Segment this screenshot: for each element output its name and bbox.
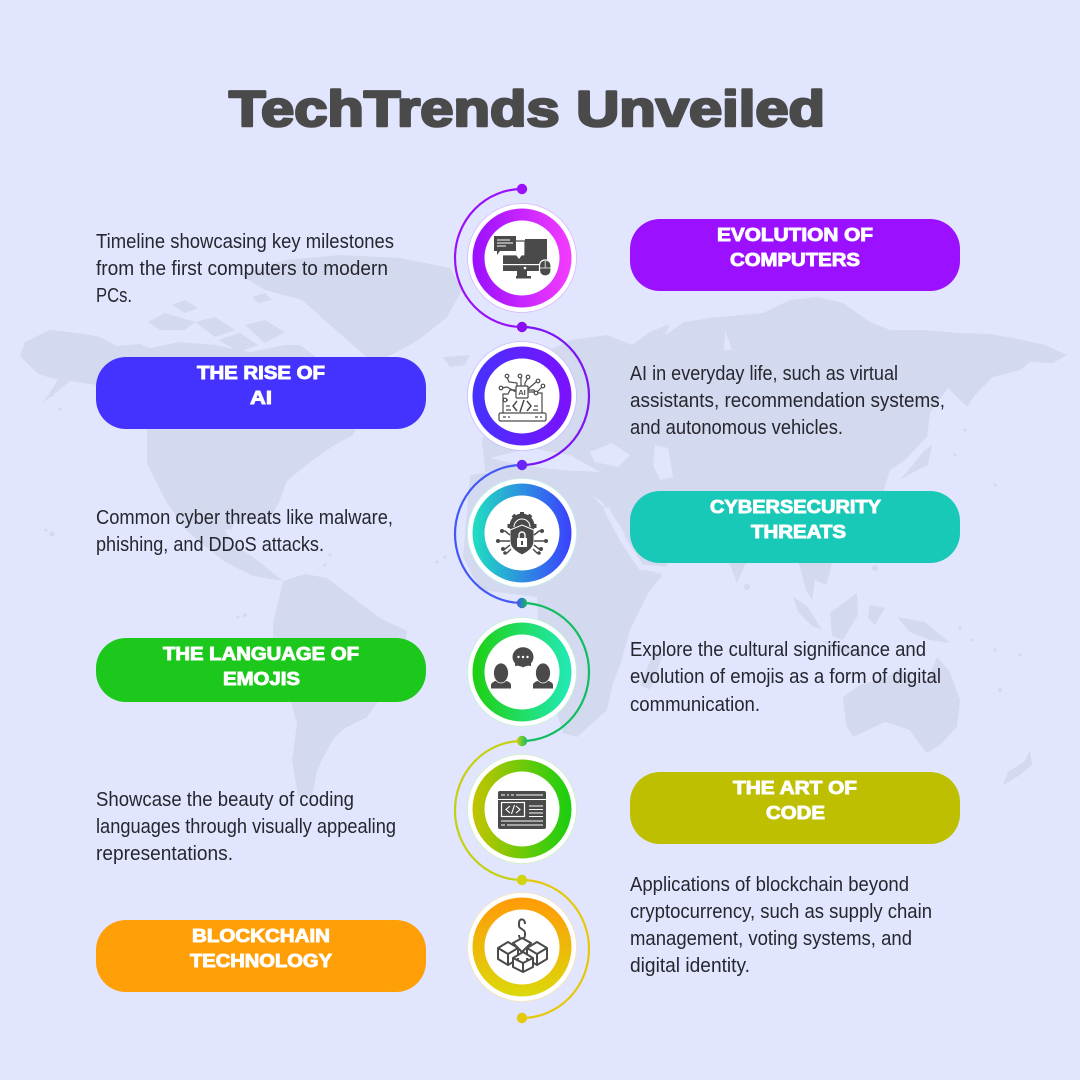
text: code description: representations. [96,843,233,865]
text: computers description: from the first computers to modern [96,258,388,280]
icon: AI chip laptop: AI [518,388,526,397]
icon: linked blocks [498,919,547,972]
text: blockchain description: digital identity. [630,955,750,977]
pill: the language of emojis: EMOJIS [223,669,300,689]
text: blockchain description: cryptocurrency, such as supply chain [630,901,932,923]
pill: the rise of AI [96,357,426,429]
text: cybersecurity description [96,507,393,556]
pill: blockchain technology: BLOCKCHAIN [192,926,330,946]
pill: evolution of computers: EVOLUTION OF [717,225,873,245]
medallion: AI [468,342,576,450]
text: cybersecurity description: phishing, and DDoS attacks. [96,534,324,556]
icon: code window [498,791,546,829]
world map background [20,255,1067,796]
text: code description: languages through visually appealing [96,816,396,838]
icon: computer with chat bubbles [494,236,551,278]
medallion: emojis [468,618,576,726]
medallion: code [468,754,576,864]
pill: the art of code: THE ART OF [733,778,857,798]
text: computers description: Timeline showcasing key milestones [96,231,394,253]
timeline connector curves [455,189,589,1018]
medallion: blockchain [468,892,576,1002]
pill: the art of code: CODE [766,803,825,823]
text: computers description [96,231,394,307]
map seas [225,302,732,570]
text: blockchain description [630,874,932,977]
text: blockchain description: Applications of blockchain beyond [630,874,909,896]
pill: the rise of AI: AI [250,388,272,408]
medallion: computers [468,204,576,312]
text: blockchain description: management, voting systems, and [630,928,912,950]
pill: the language of emojis: THE LANGUAGE OF [163,644,359,664]
text: emojis description: Explore the cultural significance and [630,639,926,661]
text: AI description: AI in everyday life, such as virtual [630,363,898,385]
timeline nodes [517,184,527,1023]
medallion: cybersecurity [468,478,576,588]
title: TechTrends Unveiled [229,81,825,137]
pill: the rise of AI: THE RISE OF [197,363,325,383]
text: emojis description: evolution of emojis as a form of digital [630,666,941,688]
text: code description: Showcase the beauty of coding [96,789,354,811]
pill: cybersecurity threats [630,491,960,563]
pill: cybersecurity threats: THREATS [751,522,846,542]
pill: evolution of computers [630,219,960,291]
pill: evolution of computers: COMPUTERS [730,250,860,270]
text: AI description: assistants, recommendation systems, [630,390,945,412]
pill: the language of emojis [96,638,426,702]
pill: blockchain technology: TECHNOLOGY [190,951,332,971]
text: AI description [630,363,945,439]
text: emojis description: communication. [630,694,760,716]
pill: the art of code [630,772,960,844]
text: cybersecurity description: Common cyber threats like malware, [96,507,393,529]
text: computers description: PCs. [96,285,132,307]
text: emojis description [630,639,941,716]
icon: two people chatting [491,647,553,688]
text: AI description: and autonomous vehicles. [630,417,843,439]
text: code description [96,789,396,865]
icon: shield and gear [496,512,548,555]
pill: cybersecurity threats: CYBERSECURITY [710,497,881,517]
pill: blockchain technology [96,920,426,992]
